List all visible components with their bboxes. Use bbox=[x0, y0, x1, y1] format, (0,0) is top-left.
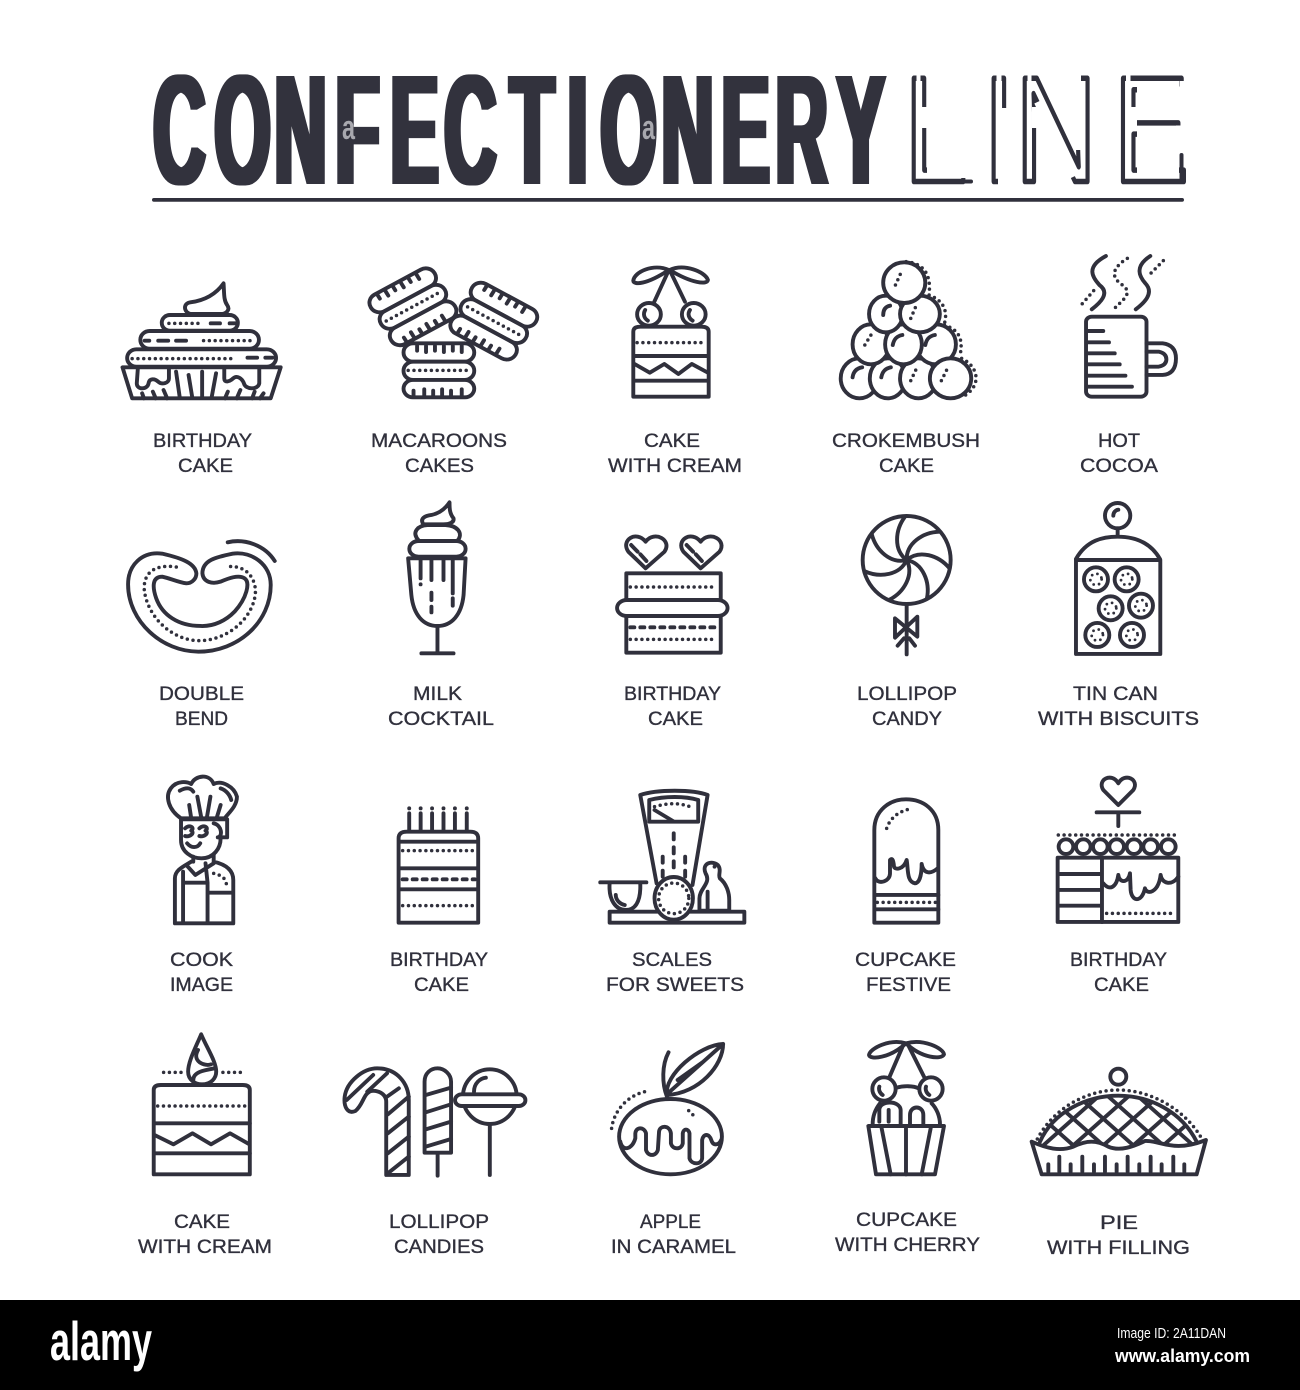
label: birthday cake: BIRTHDAY bbox=[153, 430, 252, 452]
panel: cupcake with cherry bbox=[835, 1042, 980, 1256]
label: double bend bbox=[159, 683, 244, 730]
watermark letters over title: a bbox=[642, 109, 656, 147]
panel: tin can with biscuits bbox=[1038, 503, 1199, 730]
panel: birthday cake (row 3, right) bbox=[1058, 778, 1178, 996]
label: lollipop candy: CANDY bbox=[872, 708, 942, 730]
label: milk cocktail: COCKTAIL bbox=[388, 708, 494, 730]
label: double bend: BEND bbox=[175, 708, 228, 730]
label: lollipop candy: LOLLIPOP bbox=[857, 683, 957, 705]
label: apple in caramel: IN CARAMEL bbox=[611, 1236, 736, 1258]
panel: crokembush cake bbox=[832, 262, 980, 477]
panel: apple in caramel bbox=[611, 1044, 736, 1258]
label: milk cocktail bbox=[388, 683, 494, 730]
icon: caramel apple bbox=[612, 1044, 723, 1174]
label: birthday cake: CAKE bbox=[1094, 974, 1149, 996]
label: cake with cream: WITH CREAM bbox=[138, 1236, 272, 1258]
label: lollipop candy bbox=[857, 683, 957, 730]
icon: cupcake topped with cherries bbox=[868, 1042, 944, 1174]
label: birthday cake: CAKE bbox=[178, 455, 233, 477]
panel: cake with cream (row 1) bbox=[608, 268, 742, 477]
label: hot cocoa bbox=[1080, 430, 1158, 477]
label: cupcake festive: CUPCAKE bbox=[855, 949, 956, 971]
label: scales for sweets bbox=[606, 949, 744, 996]
label: cupcake with cherry: CUPCAKE bbox=[856, 1209, 957, 1231]
icon: steaming mug bbox=[1080, 256, 1176, 397]
label: crokembush cake bbox=[832, 430, 980, 477]
label: birthday cake bbox=[390, 949, 488, 996]
label: apple in caramel: APPLE bbox=[640, 1211, 701, 1233]
label: birthday cake: BIRTHDAY bbox=[624, 683, 721, 705]
label: pie with filling bbox=[1047, 1212, 1190, 1259]
icon: cake with heart topper bbox=[1058, 778, 1178, 922]
label: cake with cream: WITH CREAM bbox=[608, 455, 742, 477]
label: cake with cream bbox=[608, 430, 742, 477]
label: cook image: COOK bbox=[170, 949, 233, 971]
icon: candy cane, popsicle and lollipop bbox=[344, 1068, 525, 1176]
icon: lattice pie bbox=[1030, 1066, 1208, 1176]
label: birthday cake bbox=[624, 683, 721, 730]
label: tin can with biscuits: WITH BISCUITS bbox=[1038, 708, 1199, 730]
panel: lollipop candies bbox=[344, 1068, 525, 1258]
panel: lollipop candy bbox=[857, 516, 957, 730]
label: birthday cake bbox=[153, 430, 252, 477]
panel: scales for sweets bbox=[600, 791, 744, 996]
panel: cupcake festive bbox=[855, 799, 956, 996]
label: double bend: DOUBLE bbox=[159, 683, 244, 705]
panel: milk cocktail bbox=[388, 502, 494, 730]
label: cake with cream: CAKE bbox=[644, 430, 700, 452]
icon: domed festive cupcake bbox=[874, 799, 938, 923]
label: macaroons cakes: CAKES bbox=[405, 455, 474, 477]
label: cupcake festive bbox=[855, 949, 956, 996]
label: birthday cake bbox=[1070, 949, 1167, 996]
label: cupcake with cherry bbox=[835, 1209, 980, 1256]
label: cook image bbox=[170, 949, 233, 996]
panel: birthday cake (row 3) bbox=[390, 808, 488, 996]
label: macaroons cakes: MACAROONS bbox=[371, 430, 507, 452]
panel: pie with filling bbox=[1030, 1066, 1208, 1254]
panel: cook image bbox=[168, 777, 237, 996]
label: lollipop candies: CANDIES bbox=[394, 1236, 484, 1258]
label: cook image: IMAGE bbox=[170, 974, 233, 996]
label: apple in caramel bbox=[611, 1211, 736, 1258]
icon: cake slice with two cherries bbox=[633, 268, 709, 397]
icon: biscuit tin bbox=[1076, 503, 1160, 654]
icon: pyramid of profiteroles bbox=[841, 262, 976, 398]
label: birthday cake: CAKE bbox=[648, 708, 703, 730]
label: birthday cake: CAKE bbox=[414, 974, 469, 996]
icon: kitchen scales with bowl and weight bbox=[600, 791, 744, 923]
label: scales for sweets: FOR SWEETS bbox=[606, 974, 744, 996]
label: tin can with biscuits bbox=[1038, 683, 1199, 730]
label: hot cocoa: HOT bbox=[1098, 430, 1140, 452]
panel: birthday cake (row 2) bbox=[617, 536, 728, 730]
footer bar bbox=[0, 1300, 1300, 1390]
panel: double bend bbox=[128, 541, 275, 730]
panel: macaroons cakes bbox=[366, 265, 541, 477]
title underline bbox=[152, 198, 1184, 202]
footer image id and site bbox=[1114, 1325, 1250, 1366]
label: lollipop candies: LOLLIPOP bbox=[389, 1211, 489, 1233]
footer image id and site: Image ID: 2A11DAN bbox=[1117, 1325, 1226, 1342]
label: cupcake with cherry: WITH CHERRY bbox=[835, 1234, 980, 1256]
watermark letters over title: a bbox=[342, 109, 356, 147]
label: pie with filling: PIE bbox=[1100, 1212, 1138, 1234]
label: crokembush cake: CROKEMBUSH bbox=[832, 430, 980, 452]
label: cake with cream bbox=[138, 1211, 272, 1258]
footer image id and site: www.alamy.com bbox=[1114, 1346, 1250, 1366]
label: milk cocktail: MILK bbox=[413, 683, 462, 705]
watermark letters over title bbox=[342, 109, 656, 147]
label: macaroons cakes bbox=[371, 430, 507, 477]
icon: cake with candle flame bbox=[154, 1034, 250, 1174]
label: tin can with biscuits: TIN CAN bbox=[1073, 683, 1158, 705]
icon: spiral lollipop bbox=[863, 516, 951, 654]
label: crokembush cake: CAKE bbox=[879, 455, 934, 477]
label: birthday cake: BIRTHDAY bbox=[390, 949, 488, 971]
label: pie with filling: WITH FILLING bbox=[1047, 1237, 1190, 1259]
icon: tall cake with candles bbox=[399, 808, 478, 923]
title bbox=[152, 41, 1189, 217]
label: birthday cake: BIRTHDAY bbox=[1070, 949, 1167, 971]
icon: milkshake glass bbox=[408, 502, 466, 653]
panel: birthday cake (row 1) bbox=[122, 283, 281, 477]
icon: three stacks of macaroons bbox=[366, 265, 541, 397]
icon: pastry chef bbox=[168, 777, 237, 923]
icon: layered birthday cake in a paper cup bbox=[122, 283, 281, 398]
icon: bent pastry bbox=[128, 541, 275, 652]
panel: cake with cream (row 4) bbox=[138, 1034, 272, 1258]
footer logo: alamy bbox=[50, 1310, 152, 1372]
icon: cake with two hearts bbox=[617, 536, 728, 653]
label: scales for sweets: SCALES bbox=[632, 949, 712, 971]
label: hot cocoa: COCOA bbox=[1080, 455, 1158, 477]
title word: confectionery: CONFECTIONERY bbox=[153, 41, 885, 217]
title word: line: LINE bbox=[905, 47, 1189, 214]
panel: hot cocoa bbox=[1080, 256, 1176, 477]
label: cake with cream: CAKE bbox=[174, 1211, 230, 1233]
label: cupcake festive: FESTIVE bbox=[866, 974, 951, 996]
label: lollipop candies bbox=[389, 1211, 489, 1258]
